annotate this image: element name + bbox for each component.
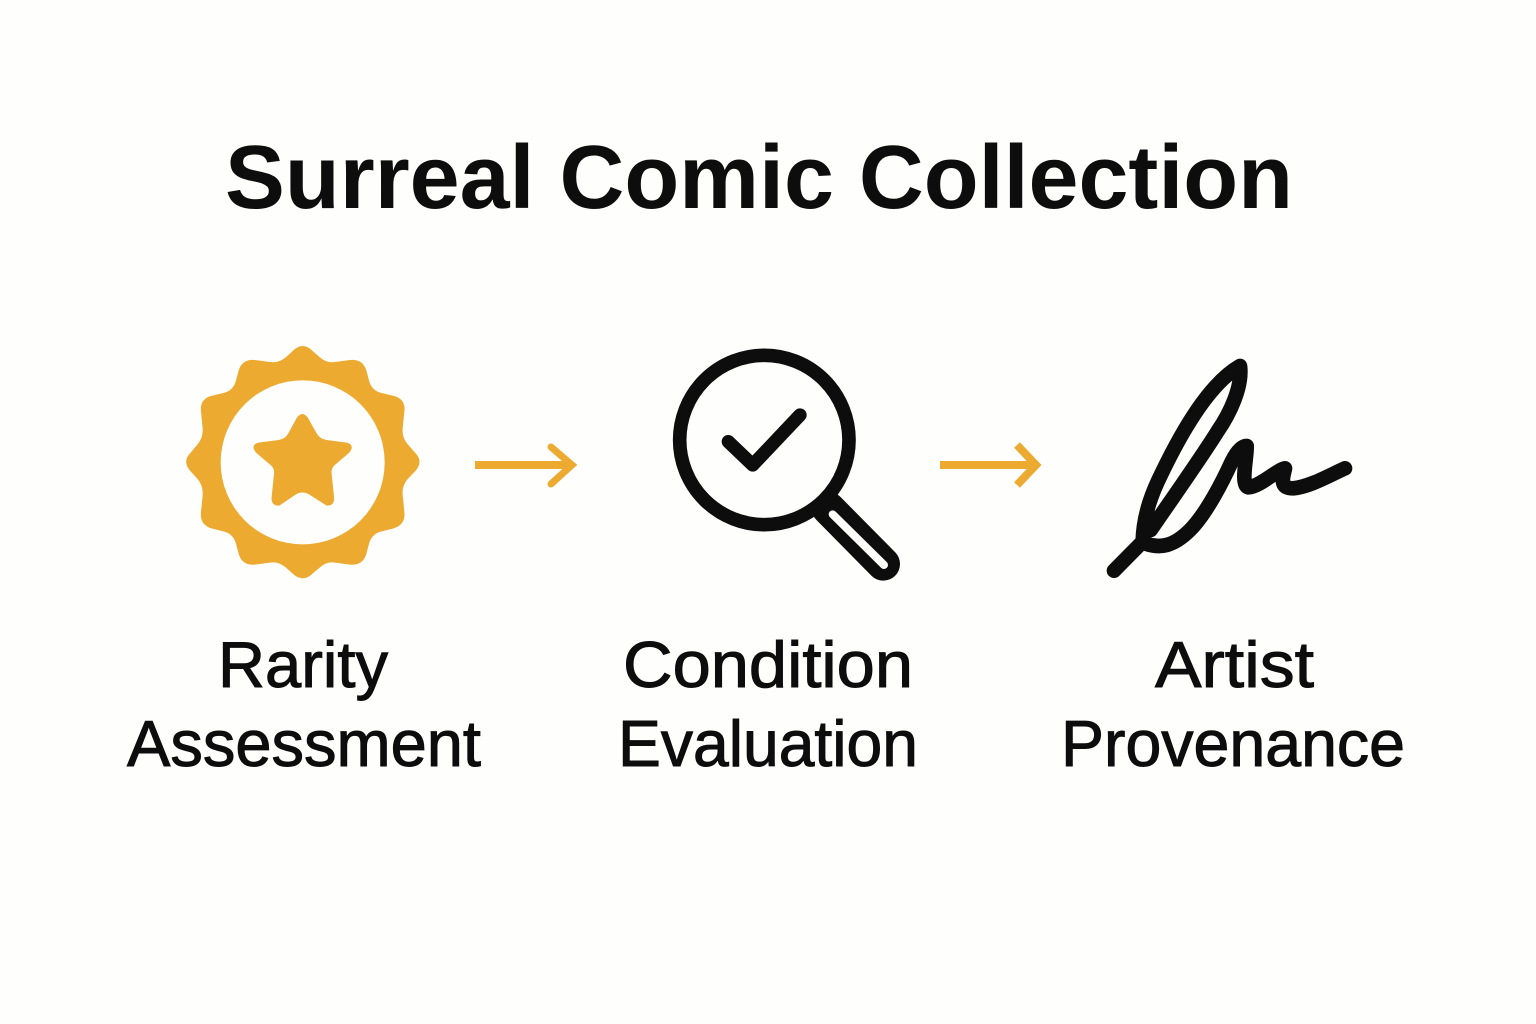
label: artist provenance: Artist <box>1155 628 1314 701</box>
label: rarity assessment: Rarity <box>218 628 388 701</box>
arrow: condition to provenance <box>940 445 1036 485</box>
label: condition evaluation <box>618 628 918 780</box>
label: rarity assessment <box>127 628 481 780</box>
title: Surreal Comic Collection <box>225 128 1293 228</box>
icon: magnifying glass with check <box>680 355 884 565</box>
icon: rarity badge with star <box>186 346 419 578</box>
label: artist provenance <box>1061 628 1405 780</box>
label: condition evaluation: Condition <box>623 628 913 701</box>
icon: artist signature <box>1114 366 1345 571</box>
label: condition evaluation: Evaluation <box>618 707 918 780</box>
label: rarity assessment: Assessment <box>127 707 481 780</box>
label: artist provenance: Provenance <box>1061 707 1405 780</box>
arrow: rarity to condition <box>475 447 572 484</box>
